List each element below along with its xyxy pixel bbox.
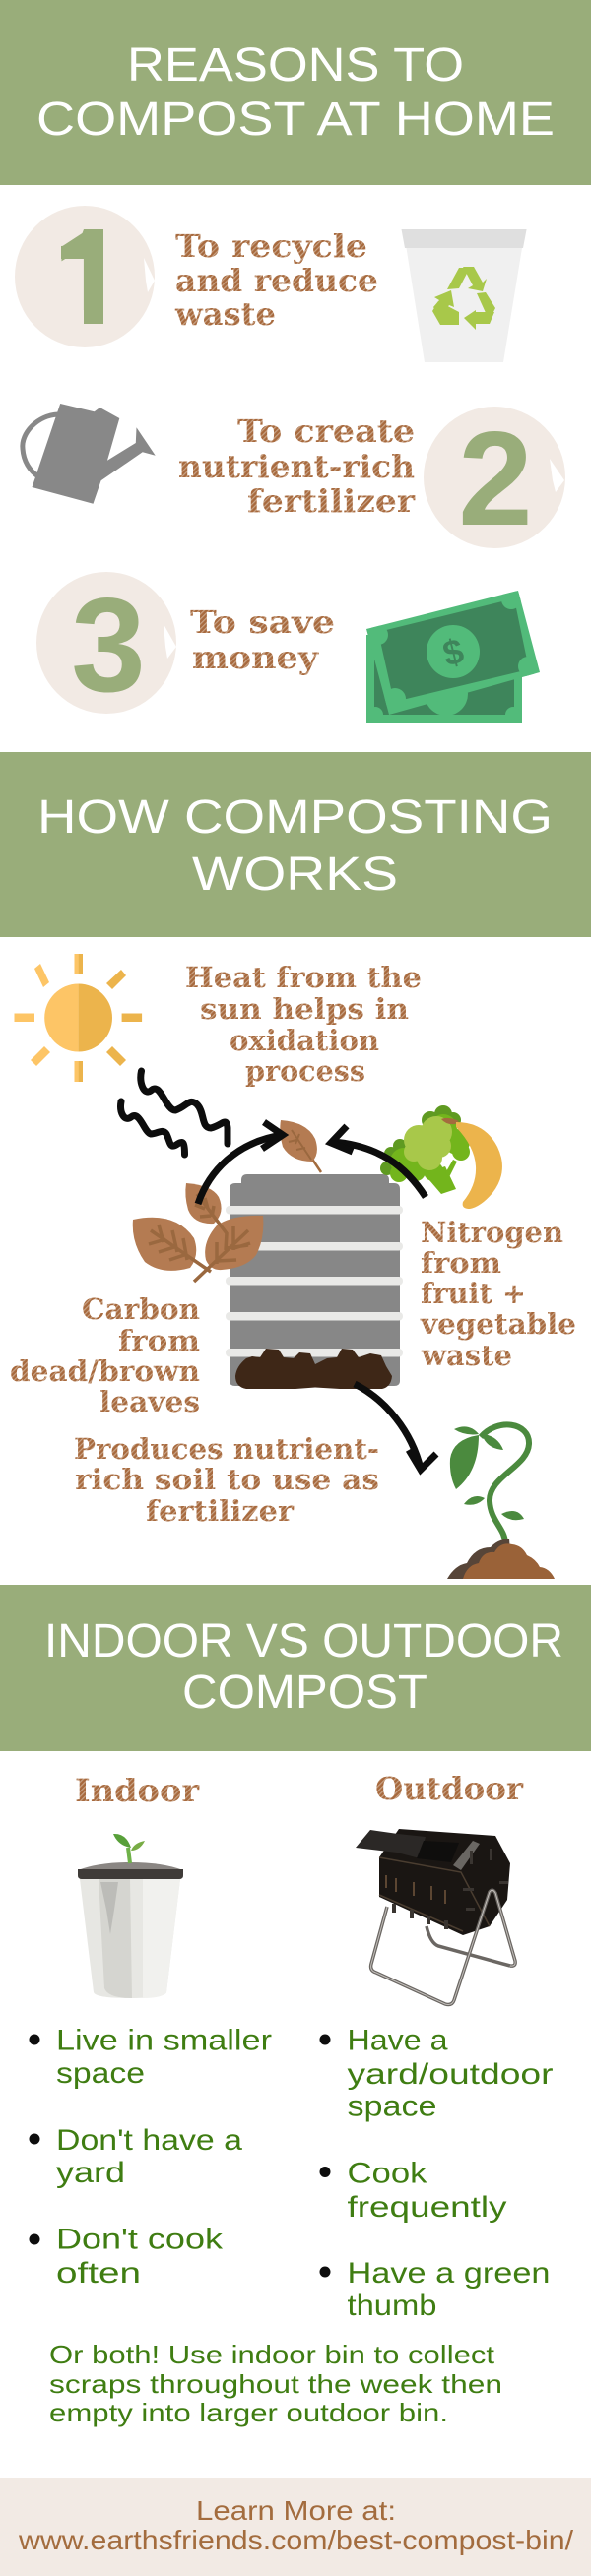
list: indoor reasons: yard	[56, 2157, 125, 2189]
text: nitrogen: from	[421, 1246, 501, 1280]
header: how composting works	[0, 752, 591, 937]
list: outdoor reasons: Have a	[347, 2024, 448, 2057]
header: reasons to compost at home	[0, 0, 591, 185]
list: outdoor reasons: Have a green	[347, 2257, 550, 2290]
list: outdoor reasons	[319, 2024, 554, 2322]
icon: recycle arrows	[432, 267, 495, 330]
list: indoor reasons: space	[56, 2057, 145, 2090]
text: carbon: Carbon	[82, 1292, 200, 1326]
text: produces soil: Produces nutrient-	[74, 1432, 379, 1466]
reason 1 text: and reduce	[175, 262, 378, 299]
header: reasons to compost at home: COMPOST AT HOME	[36, 94, 555, 146]
reason 3 text: To save	[190, 603, 335, 641]
header: how composting works: HOW COMPOSTING	[37, 791, 553, 844]
text: or both note: scraps throughout the week then	[49, 2369, 502, 2399]
text: carbon: from	[118, 1324, 200, 1357]
text: heat from the sun: sun helps in	[200, 992, 409, 1026]
header: reasons to compost at home: REASONS TO	[127, 39, 464, 92]
list: outdoor reasons: yard/outdoor	[347, 2058, 554, 2091]
text: nitrogen: vegetable	[420, 1307, 576, 1341]
list: outdoor reasons: thumb	[347, 2290, 437, 2322]
text: carbon: dead/brown	[10, 1354, 200, 1388]
list: indoor reasons	[30, 2024, 272, 2290]
text: produces soil: fertilizer	[146, 1494, 295, 1528]
reason 1 text: waste	[174, 295, 276, 333]
icon: recycling bin	[402, 229, 527, 362]
icon: indoor compost bin	[78, 1834, 183, 1998]
header: indoor vs outdoor compost: INDOOR VS OUTDOOR	[44, 1615, 563, 1667]
list: outdoor reasons: space	[347, 2091, 437, 2122]
arrow: soil to plant	[355, 1384, 436, 1470]
reason 2 text: fertilizer	[247, 482, 416, 520]
reason 1 number badge	[15, 203, 155, 352]
text: heat from the sun: oxidation	[230, 1024, 379, 1057]
list: outdoor reasons: frequently	[347, 2191, 506, 2224]
reason 1 number badge: 1	[52, 203, 127, 352]
reason 2 number badge: 2	[458, 404, 533, 553]
header: how composting works: WORKS	[192, 848, 398, 901]
icon: heat waves	[121, 1071, 228, 1155]
icon: compost bin	[226, 1174, 403, 1389]
list: indoor reasons: Don't have a	[56, 2124, 242, 2157]
icon: sprouting plant	[447, 1424, 555, 1579]
icon: watering can	[23, 404, 156, 504]
text: carbon	[10, 1292, 200, 1418]
list: indoor reasons: Don't cook	[56, 2223, 224, 2256]
icon: top leaf	[280, 1120, 321, 1172]
text: heat from the sun	[185, 961, 422, 1088]
reason 3 number badge	[36, 570, 176, 720]
text: or both note	[49, 2340, 502, 2427]
text: nitrogen: waste	[421, 1339, 512, 1372]
text: nitrogen: fruit +	[421, 1277, 526, 1310]
reason 3 number badge: 3	[71, 570, 146, 720]
footer: learn more	[0, 2478, 591, 2576]
list: outdoor reasons: Cook	[347, 2158, 428, 2189]
footer: learn more: Learn More at:	[196, 2495, 396, 2526]
text: or both note: Or both! Use indoor bin to collect	[49, 2340, 495, 2369]
icon: broccoli and banana	[380, 1105, 502, 1209]
footer: learn more: www.earthsfriends.com/best-compost-bin/	[18, 2525, 573, 2555]
text: heat from the sun: Heat from the	[185, 961, 422, 994]
reason 3 text: money	[192, 639, 320, 676]
icon: outdoor compost tumbler	[356, 1829, 515, 2004]
compost soil	[235, 1349, 392, 1389]
icon: money bills	[366, 590, 540, 723]
icon: money bills: $	[438, 630, 468, 674]
text: carbon: leaves	[99, 1385, 200, 1418]
reason 3 text	[190, 603, 335, 676]
reason 2 number badge	[424, 404, 565, 553]
arrow: food to top	[331, 1126, 426, 1197]
text: or both note: empty into larger outdoor bin.	[49, 2398, 448, 2427]
reason 2 text: To create	[237, 412, 415, 450]
header: indoor vs outdoor compost: COMPOST	[182, 1666, 427, 1719]
list: indoor reasons: Live in smaller	[56, 2024, 272, 2057]
list: indoor reasons: often	[56, 2257, 141, 2290]
reason 2 text	[178, 412, 416, 520]
text: produces soil: rich soil to use as	[75, 1463, 379, 1496]
heading: outdoor: Outdoor	[375, 1770, 524, 1807]
arrow: leaves to top	[198, 1122, 283, 1204]
reason 1 text	[174, 227, 378, 333]
text: nitrogen	[420, 1216, 576, 1372]
header: indoor vs outdoor compost	[0, 1585, 591, 1751]
text: heat from the sun: process	[245, 1054, 365, 1088]
icon: fallen leaves	[133, 1183, 263, 1282]
reason 2 text: nutrient-rich	[178, 448, 415, 485]
heading: indoor: Indoor	[75, 1772, 200, 1809]
text: produces soil	[74, 1432, 379, 1528]
reason 1 text: To recycle	[175, 227, 367, 265]
text: nitrogen: Nitrogen	[421, 1216, 563, 1249]
icon: sun	[14, 954, 142, 1082]
